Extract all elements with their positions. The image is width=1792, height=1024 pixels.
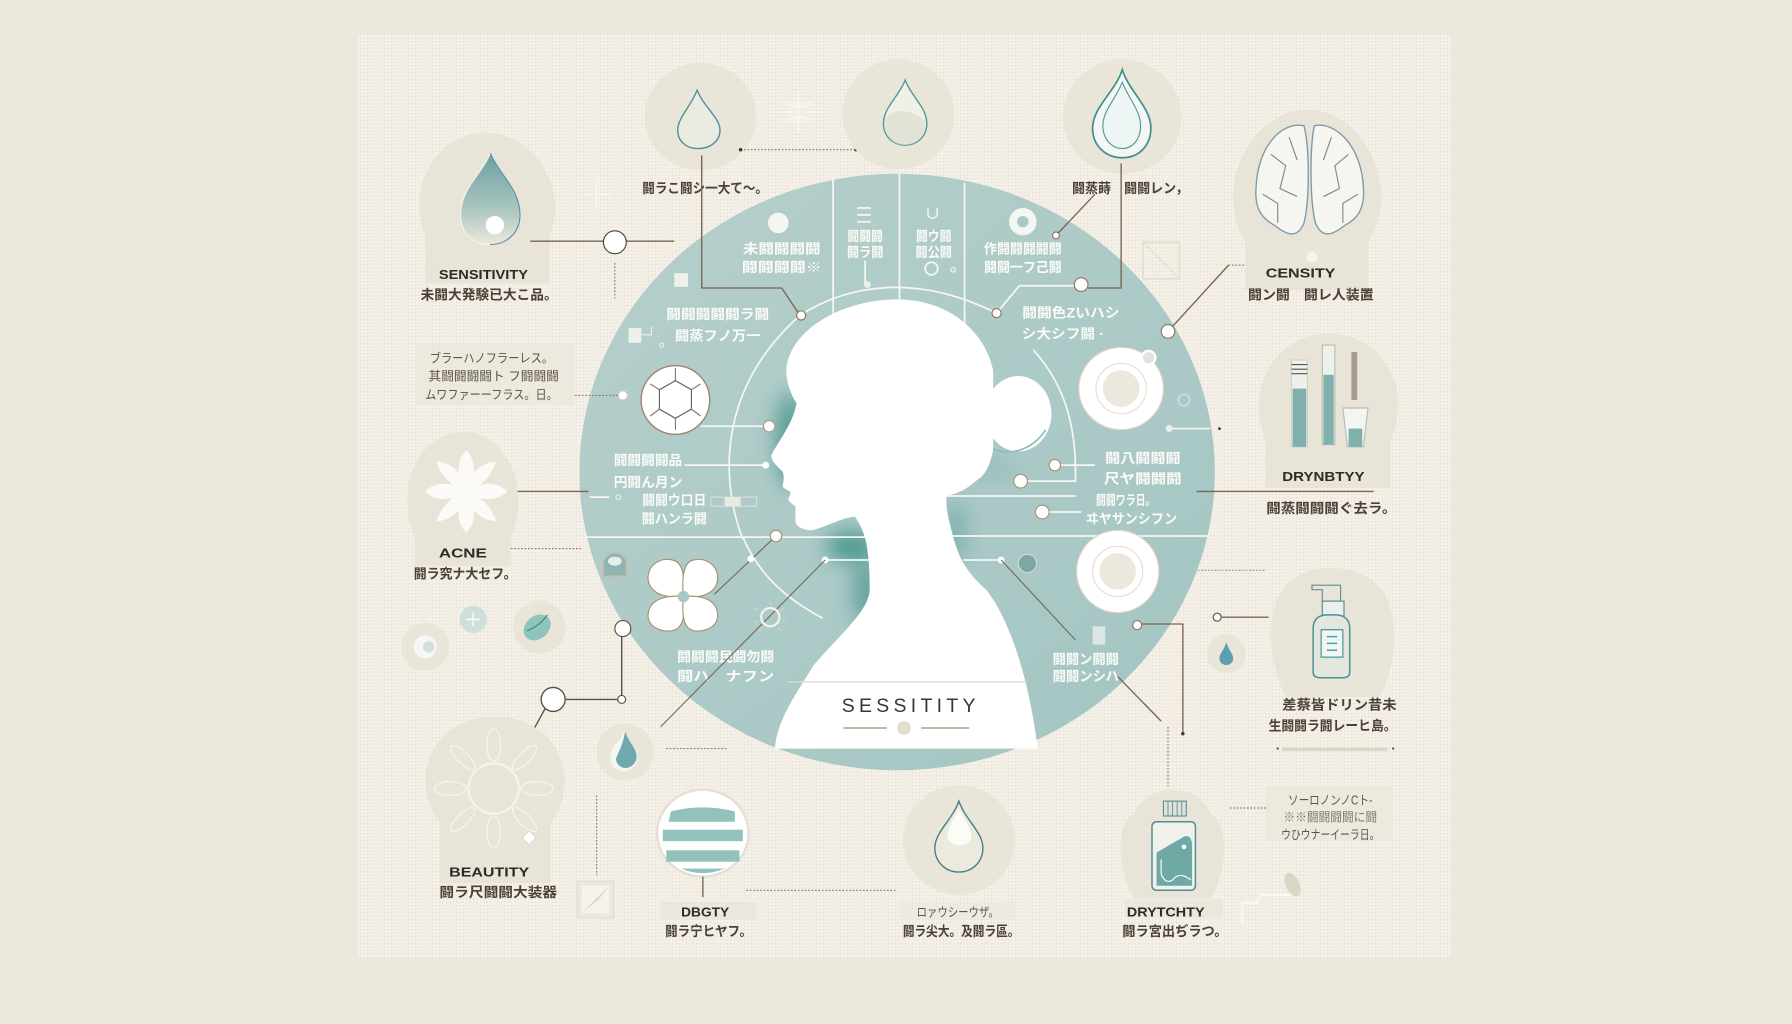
band title: SESSITITY xyxy=(842,695,975,717)
label: dbgty: 闘ラ宁ヒヤフ。 xyxy=(665,923,752,939)
label: bottom drop: 闘ラ尖大。及闘ラ區。 xyxy=(903,923,1019,939)
sparkles xyxy=(583,91,821,208)
ring icons xyxy=(925,262,955,275)
keyhole: bottle xyxy=(1120,790,1227,939)
label: dbgty: DBGTY xyxy=(681,905,729,920)
description: 闘ラ究ナ大セフ。 xyxy=(414,565,517,581)
dotted leaders lower left xyxy=(597,749,897,890)
name band xyxy=(787,681,1027,735)
label: bottom drop: ロァウシーウザ。 xyxy=(917,906,999,920)
flower icon A xyxy=(768,213,789,233)
flower icon B xyxy=(1009,208,1037,235)
four petal flower xyxy=(648,559,718,631)
block I xyxy=(1104,451,1182,486)
grid lines inside circle xyxy=(585,174,1208,618)
connector B xyxy=(864,261,871,288)
keyhole: beauty xyxy=(425,717,565,900)
tan bar under description xyxy=(1277,747,1394,751)
folded square icon xyxy=(577,881,614,918)
head silhouette xyxy=(771,299,1051,749)
label: SENSITIVITY xyxy=(439,267,528,282)
top drop 3 xyxy=(1063,59,1182,174)
block E: 闘闘闘闘闘ラ闘 xyxy=(666,307,769,322)
block I: 尺ヤ闘闘闘 xyxy=(1104,471,1182,486)
block H: 闘闘ウ口日 xyxy=(642,493,706,508)
label: bottom drop xyxy=(901,902,1019,939)
block G: 闘闘闘闘品 xyxy=(614,453,682,468)
label xyxy=(1125,899,1223,918)
block G: 円闘ん月ン xyxy=(614,475,682,490)
right neck connectors xyxy=(963,554,1185,786)
block B: 闘闘闘 xyxy=(847,229,883,244)
outlined square xyxy=(1143,242,1179,279)
block K: 闘闘闘民闘勿闘 xyxy=(677,650,774,665)
block G xyxy=(614,453,682,490)
small bar H xyxy=(590,495,757,506)
connector: callout left xyxy=(575,391,627,400)
callout right: ソーロノンノCト- xyxy=(1288,794,1373,808)
keyhole: brain xyxy=(1233,110,1381,302)
label: BEAUTITY xyxy=(449,865,529,880)
callout right xyxy=(1266,786,1393,842)
small icons E xyxy=(629,273,688,347)
striped circle xyxy=(657,790,749,877)
connectors: lower left ring xyxy=(661,530,869,727)
connectors: left ring xyxy=(685,421,775,469)
description line 1: 差蔡皆ドリン昔未 xyxy=(1282,697,1397,713)
block B xyxy=(847,229,883,260)
stair line and leaf xyxy=(1242,870,1304,923)
hat icon xyxy=(603,553,626,576)
block K: 闘ハ ナフン xyxy=(677,669,774,684)
callout left xyxy=(416,343,575,405)
callout left: ムワファーーフラス。日。 xyxy=(425,388,558,402)
central circle xyxy=(579,174,1215,770)
bun shading xyxy=(993,430,1046,452)
connectors: acne xyxy=(511,491,589,549)
connector: sensitivity xyxy=(530,231,674,298)
block J: ヰヤサンシフン xyxy=(1086,511,1177,526)
description: 闘ン闘 闘レ人装置 xyxy=(1248,286,1374,302)
icon U xyxy=(928,208,937,218)
block L: 闘闘ン闘闘 xyxy=(1053,652,1119,667)
block J: 闘闘ワラ日。 xyxy=(1096,493,1155,508)
callout left: ブラーハノフラーレス。 xyxy=(430,350,553,365)
block C: 闘ウ闘 xyxy=(916,229,951,244)
inner text blocks xyxy=(590,208,1182,684)
keyhole: acne xyxy=(407,432,518,581)
keyhole: pump bottle xyxy=(1269,568,1397,733)
hexagon circle xyxy=(641,366,710,434)
keyhole: bottle: DRYTCHTY xyxy=(1127,905,1205,920)
label: dbgty xyxy=(661,877,757,939)
label: DRYNBTYY xyxy=(1282,469,1365,484)
small pearl xyxy=(401,623,449,671)
block E: 闘蒸フノ万一 xyxy=(675,329,761,344)
block D: 闘闘一フ己闘 xyxy=(984,260,1062,275)
top drop 2 xyxy=(842,59,954,169)
textured panel xyxy=(358,34,1451,958)
dotted callout leader xyxy=(1230,807,1266,809)
connectors: right ring xyxy=(1014,459,1095,519)
block L: 闘闘ンシハ xyxy=(1053,669,1119,684)
callout left: 其闘闘闘闘ト フ闘闘闘 xyxy=(429,370,559,384)
connector: top drop 1 xyxy=(702,148,858,320)
connector: pump bottle xyxy=(1213,613,1269,621)
small plus xyxy=(459,606,487,633)
block E xyxy=(666,307,769,344)
block L xyxy=(1053,652,1119,684)
block A: 未闘闘闘闘 xyxy=(743,242,821,257)
connector: brain xyxy=(1161,265,1246,338)
block K xyxy=(677,650,774,684)
keyhole: sensitivity xyxy=(420,133,558,302)
description: 闘蒸闘闘闘ぐ去ラ。 xyxy=(1266,500,1397,516)
block C: 闘公闘 xyxy=(915,245,952,260)
bottom drop xyxy=(903,785,1015,895)
description line 2: 生闘闘ラ闘レーヒ島。 xyxy=(1269,717,1397,733)
block C xyxy=(915,229,952,260)
top text 3: 闘蒸蒔 闘闘レン， xyxy=(1072,181,1189,196)
block J xyxy=(1086,493,1177,526)
small drop circle xyxy=(1207,634,1246,673)
block B: 闘ラ闘 xyxy=(847,245,883,260)
block F xyxy=(1022,305,1119,341)
description: 未闘大発験已大こ品。 xyxy=(421,286,558,302)
sun icon xyxy=(754,601,786,631)
description: 闘ラ宮出ぢラつ。 xyxy=(1122,923,1227,939)
block I: 闘八闘闘闘 xyxy=(1105,451,1181,466)
dryness leader line xyxy=(1197,490,1374,492)
dotted leader right xyxy=(1198,569,1265,571)
block A xyxy=(742,242,822,275)
block H: 闘ハンラ闘 xyxy=(642,511,707,526)
connector network: beauty xyxy=(533,621,631,731)
block D xyxy=(984,242,1062,275)
top drop 1 xyxy=(645,63,757,170)
block A: 闘闘闘闘※ xyxy=(742,260,822,275)
callout right: ウひウナーイーラ日。 xyxy=(1281,828,1379,842)
keyhole: dryness xyxy=(1259,334,1398,516)
top text 1: 闘ラこ闘シ一大て〜。 xyxy=(642,180,768,196)
label: ACNE xyxy=(439,546,487,561)
small pill xyxy=(513,601,566,654)
block F: 闘闘色Zいハシ xyxy=(1022,305,1119,321)
block D: 作闘闘闘闘闘 xyxy=(984,242,1062,257)
connector: top drop 3 xyxy=(992,163,1121,318)
description: 闘ラ尺闘闘大装器 xyxy=(439,884,557,900)
ring icon right xyxy=(1166,394,1221,432)
icon S xyxy=(857,208,871,222)
target disc lower xyxy=(1077,530,1159,613)
label: CENSITY xyxy=(1266,266,1336,281)
block H xyxy=(642,493,707,526)
target disc upper xyxy=(1079,347,1163,430)
teal drop circle xyxy=(597,723,654,781)
block F: シ大シフ闘 · xyxy=(1022,325,1104,341)
callout right: ※※闘闘闘闘に闘 xyxy=(1283,811,1377,825)
